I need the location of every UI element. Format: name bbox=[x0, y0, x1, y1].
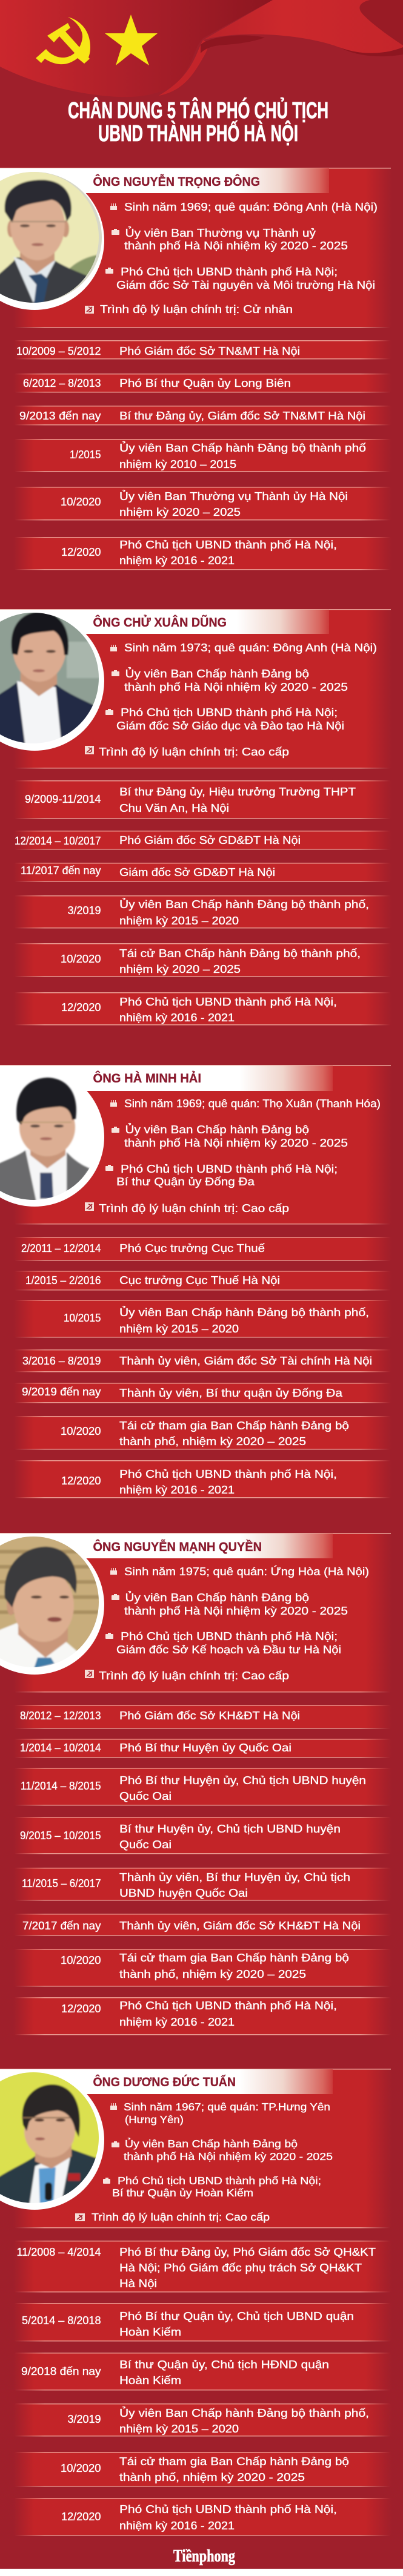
row bbox=[13, 2498, 392, 2535]
row: Phó Chủ tịch UBND thành phố Hà Nội, bbox=[119, 2000, 337, 2012]
row bbox=[13, 1817, 392, 1854]
icon: birth bbox=[110, 1100, 117, 1107]
row: 11/2015 – 6/2017 bbox=[22, 1877, 101, 1889]
row: 3/2019 bbox=[68, 2413, 101, 2425]
biography: Phó Chủ tịch UBND thành phố Hà Nội; bbox=[118, 2175, 321, 2187]
biography: Trình độ lý luận chính trị: Cao cấp bbox=[99, 1202, 289, 1214]
row bbox=[13, 780, 392, 819]
row: 9/2019 đến nay bbox=[22, 1386, 101, 1398]
row: Thành ủy viên, Bí thư Huyện ủy, Chủ tịch bbox=[119, 1871, 350, 1883]
row: Cục trưởng Cục Thuế Hà Nội bbox=[119, 1274, 280, 1286]
biography: Phó Chủ tịch UBND thành phố Hà Nội; bbox=[121, 265, 338, 278]
biography: (Hưng Yên) bbox=[125, 2113, 184, 2126]
portrait bbox=[0, 2067, 104, 2210]
row: UBND huyện Quốc Oai bbox=[119, 1887, 248, 1899]
row: nhiệm kỳ 2016 - 2021 bbox=[119, 2016, 235, 2028]
biography: Trình độ lý luận chính trị: Cao cấp bbox=[99, 1669, 289, 1682]
row: 10/2015 bbox=[64, 1312, 101, 1324]
name heading: ÔNG DƯƠNG ĐỨC TUẤN bbox=[93, 2075, 236, 2089]
row: Quốc Oai bbox=[119, 1839, 172, 1851]
row: nhiệm kỳ 2015 – 2020 bbox=[119, 1323, 239, 1335]
row bbox=[13, 992, 392, 1026]
biography: Ủy viên Ban Chấp hành Đảng bộ bbox=[125, 1591, 309, 1604]
row: Hà Nội; Phó Giám đốc phụ trách Sở QH&KT bbox=[119, 2262, 362, 2274]
icon: birth bbox=[110, 1568, 117, 1575]
name heading: ÔNG NGUYỄN MẠNH QUYỀN bbox=[93, 1540, 262, 1554]
icon: briefcase bbox=[112, 1127, 119, 1133]
row: 1/2014 – 10/2014 bbox=[20, 1742, 101, 1754]
biography: Ủy viên Ban Chấp hành Đảng bộ bbox=[125, 667, 309, 680]
icon: party bbox=[85, 1202, 94, 1211]
row bbox=[13, 2452, 392, 2487]
row: nhiệm kỳ 2016 - 2021 bbox=[119, 2520, 235, 2532]
timeline: Hà Minh Hải bbox=[13, 1237, 392, 1498]
row: Tái cử tham gia Ban Chấp hành Đảng bộ bbox=[119, 1952, 349, 1964]
biography: Giám đốc Sở Giáo dục và Đào tạo Hà Nội bbox=[116, 719, 344, 732]
row: 3/2019 bbox=[68, 904, 101, 917]
row: 1/2015 – 2/2016 bbox=[25, 1274, 101, 1286]
row bbox=[13, 406, 392, 425]
row: thành phố, nhiệm kỳ 2020 – 2025 bbox=[119, 1435, 306, 1448]
row bbox=[13, 1914, 392, 1936]
row: 9/2015 – 10/2015 bbox=[20, 1830, 101, 1842]
icon: briefcase bbox=[105, 268, 113, 274]
row bbox=[13, 374, 392, 392]
biography: Phó Chủ tịch UBND thành phố Hà Nội; bbox=[121, 1630, 338, 1642]
panel: Nguyễn Mạnh Quyền bbox=[0, 1532, 392, 1693]
row: 9/2018 đến nay bbox=[21, 2365, 101, 2377]
title bbox=[68, 97, 328, 147]
row: Tái cử Ban Chấp hành Đảng bộ thành phố, bbox=[119, 947, 361, 960]
biography: thành phố Hà Nội nhiệm kỳ 2020 - 2025 bbox=[124, 680, 348, 693]
row: 9/2009-11/2014 bbox=[25, 793, 101, 805]
icon: birth bbox=[110, 203, 117, 210]
row: Giám đốc Sở GD&ĐT Hà Nội bbox=[119, 866, 275, 878]
row bbox=[13, 1768, 392, 1805]
row: 11/2008 – 4/2014 bbox=[17, 2246, 101, 2258]
row: nhiệm kỳ 2015 – 2020 bbox=[119, 915, 239, 927]
row: 10/2020 bbox=[61, 1425, 101, 1437]
row: Phó Giám đốc Sở GD&ĐT Hà Nội bbox=[119, 834, 301, 846]
row: Thành ủy viên, Giám đốc Sở Tài chính Hà Nội bbox=[119, 1355, 372, 1367]
row: Phó Chủ tịch UBND thành phố Hà Nội, bbox=[119, 1468, 337, 1480]
row: Hà Nội bbox=[119, 2278, 157, 2290]
logo: Tiền Phong: Tiềnphong bbox=[173, 2546, 235, 2566]
row: 10/2020 bbox=[61, 2462, 101, 2474]
biography: Giám đốc Sở Kế hoạch và Đầu tư Hà Nội bbox=[116, 1643, 341, 1656]
row: nhiệm kỳ 2020 – 2025 bbox=[119, 963, 241, 975]
biography: Phó Chủ tịch UBND thành phố Hà Nội; bbox=[121, 706, 338, 719]
row bbox=[13, 2403, 392, 2436]
row: 7/2017 đến nay bbox=[22, 1920, 101, 1932]
biography: Phó Chủ tịch UBND thành phố Hà Nội; bbox=[121, 1162, 338, 1175]
biography bbox=[85, 200, 378, 315]
portrait bbox=[0, 170, 104, 310]
row: nhiệm kỳ 2015 – 2020 bbox=[119, 2423, 239, 2435]
biography: thành phố Hà Nội nhiệm kỳ 2020 - 2025 bbox=[124, 1136, 348, 1149]
row: nhiệm kỳ 2016 - 2021 bbox=[119, 1484, 235, 1496]
row bbox=[13, 1868, 392, 1901]
row bbox=[13, 863, 392, 881]
icon: briefcase bbox=[112, 1594, 119, 1600]
row: Ủy viên Ban Thường vụ Thành ủy Hà Nội bbox=[119, 490, 348, 502]
name heading: ÔNG HÀ MINH HẢI bbox=[93, 1071, 201, 1085]
icon: party bbox=[75, 2213, 85, 2221]
row: 10/2009 – 5/2012 bbox=[16, 345, 101, 357]
row: 3/2016 – 8/2019 bbox=[22, 1355, 101, 1367]
row bbox=[13, 831, 392, 850]
row bbox=[13, 1300, 392, 1338]
row: 12/2020 bbox=[61, 1475, 101, 1487]
icon: party bbox=[85, 306, 94, 314]
row: Phó Bí thư Huyện ủy, Chủ tịch UBND huyện bbox=[119, 1774, 366, 1787]
row: Chu Văn An, Hà Nội bbox=[119, 802, 229, 814]
portrait bbox=[0, 608, 104, 751]
icon: briefcase bbox=[105, 709, 113, 715]
portrait bbox=[0, 1532, 104, 1675]
row: 10/2020 bbox=[61, 496, 101, 508]
row bbox=[13, 1460, 392, 1498]
row: 11/2017 đến nay bbox=[21, 865, 101, 877]
timeline: Dương Đức Tuấn bbox=[13, 2241, 392, 2535]
row: Phó Bí thư Quận ủy, Chủ tịch UBND quận bbox=[119, 2310, 354, 2322]
icon: hammer and sickle bbox=[36, 17, 90, 64]
icon: birth bbox=[110, 2103, 117, 2110]
biography: Sinh năm 1975; quê quán: Ứng Hòa (Hà Nội) bbox=[124, 1565, 369, 1578]
icon: briefcase bbox=[103, 2178, 110, 2184]
row: 12/2020 bbox=[61, 2511, 101, 2523]
row bbox=[13, 1997, 392, 2035]
row: Ủy viên Ban Chấp hành Đảng bộ thành phố, bbox=[119, 1306, 369, 1319]
row: Quốc Oai bbox=[119, 1790, 172, 1802]
row bbox=[13, 1416, 392, 1449]
icon: star bbox=[105, 15, 158, 65]
row: Thành ủy viên, Bí thư quận ủy Đống Đa bbox=[119, 1387, 343, 1399]
portrait bbox=[0, 1067, 104, 1207]
icon: briefcase bbox=[105, 1165, 113, 1171]
row: Phó Bí thư Huyện ủy Quốc Oai bbox=[119, 1742, 291, 1754]
row: 9/2013 đến nay bbox=[19, 410, 101, 422]
row bbox=[13, 2353, 392, 2390]
biography: Sinh năm 1973; quê quán: Đông Anh (Hà Nội) bbox=[124, 641, 377, 654]
row: nhiệm kỳ 2016 - 2021 bbox=[119, 555, 235, 567]
row: Ủy viên Ban Chấp hành Đảng bộ thành phố, bbox=[119, 898, 369, 911]
row: 12/2020 bbox=[61, 1001, 101, 1013]
row: thành phố, nhiệm kỳ 2020 - 2025 bbox=[119, 2471, 305, 2483]
row bbox=[13, 2241, 392, 2292]
row: nhiệm kỳ 2016 - 2021 bbox=[119, 1012, 235, 1024]
row: nhiệm kỳ 2010 – 2015 bbox=[119, 458, 236, 470]
panel: Hà Minh Hải bbox=[0, 1065, 392, 1224]
biography: Ủy viên Ban Chấp hành Đảng bộ bbox=[125, 2137, 298, 2150]
row: Bí thư Huyện ủy, Chủ tịch UBND huyện bbox=[119, 1823, 341, 1835]
panel: Dương Đức Tuấn bbox=[0, 2067, 392, 2228]
row: Phó Giám đốc Sở KH&ĐT Hà Nội bbox=[119, 1710, 300, 1722]
biography: Giám đốc Sở Tài nguyên và Môi trường Hà Nội bbox=[116, 278, 375, 291]
biography: thành phố Hà Nội nhiệm kỳ 2020 - 2025 bbox=[124, 239, 348, 252]
row bbox=[13, 1271, 392, 1291]
row: Phó Cục trưởng Cục Thuế bbox=[119, 1242, 265, 1254]
row: Phó Bí thư Đảng ủy, Phó Giám đốc Sở QH&KT bbox=[119, 2246, 376, 2258]
biography bbox=[85, 1565, 369, 1682]
row: Phó Chủ tịch UBND thành phố Hà Nội, bbox=[119, 539, 337, 551]
row: Hoàn Kiếm bbox=[119, 2374, 181, 2387]
biography: Trình độ lý luận chính trị: Cao cấp bbox=[92, 2211, 270, 2223]
icon: birth bbox=[110, 645, 117, 651]
row: 11/2014 – 8/2015 bbox=[21, 1780, 101, 1792]
biography: Bí thư Quận ủy Đống Đa bbox=[116, 1175, 255, 1188]
timeline: Nguyễn Mạnh Quyền bbox=[13, 1705, 392, 2035]
biography: Trình độ lý luận chính trị: Cử nhân bbox=[100, 303, 293, 315]
biography: Ủy viên Ban Thường vụ Thành uỷ bbox=[125, 226, 316, 239]
biography: Trình độ lý luận chính trị: Cao cấp bbox=[99, 745, 289, 758]
biography: Ủy viên Ban Chấp hành Đảng bộ bbox=[125, 1123, 309, 1136]
row bbox=[13, 2303, 392, 2342]
icon: briefcase bbox=[112, 229, 119, 235]
biography: thành phố Hà Nội nhiệm kỳ 2020 - 2025 bbox=[124, 2150, 333, 2163]
row: nhiệm kỳ 2020 – 2025 bbox=[119, 506, 241, 518]
row bbox=[13, 1739, 392, 1758]
row bbox=[13, 1705, 392, 1729]
panel: Nguyễn Trọng Đông bbox=[0, 168, 392, 328]
icon: party bbox=[85, 1670, 94, 1678]
row: 8/2012 – 12/2013 bbox=[20, 1710, 101, 1722]
row bbox=[13, 1383, 392, 1403]
biography bbox=[85, 641, 377, 758]
row: Ủy viên Ban Chấp hành Đảng bộ thành phố bbox=[119, 441, 366, 454]
row bbox=[13, 1349, 392, 1372]
panel: Chử Xuân Dũng bbox=[0, 608, 392, 769]
row: Tái cử tham gia Ban Chấp hành Đảng bộ bbox=[119, 1420, 349, 1432]
row bbox=[13, 943, 392, 977]
name heading: ÔNG NGUYỄN TRỌNG ĐÔNG bbox=[93, 174, 260, 189]
icon: briefcase bbox=[105, 1633, 113, 1639]
row: 1/2015 bbox=[70, 449, 101, 461]
row: Thành ủy viên, Giám đốc Sở KH&ĐT Hà Nội bbox=[119, 1920, 361, 1932]
row: 5/2014 – 8/2018 bbox=[22, 2314, 101, 2327]
biography bbox=[75, 2101, 333, 2223]
biography bbox=[85, 1097, 381, 1214]
row: Hoàn Kiếm bbox=[119, 2326, 181, 2338]
row: Bí thư Đảng ủy, Hiệu trưởng Trường THPT bbox=[119, 786, 356, 798]
title: UBND THÀNH PHỐ HÀ NỘI bbox=[98, 119, 298, 147]
biography: thành phố Hà Nội nhiệm kỳ 2020 - 2025 bbox=[124, 1604, 348, 1617]
icon: briefcase bbox=[112, 670, 119, 676]
row: Phó Bí thư Quận ủy Long Biên bbox=[119, 377, 291, 389]
row bbox=[13, 1237, 392, 1260]
flag header bbox=[0, 0, 403, 97]
biography: Bí thư Quận ủy Hoàn Kiếm bbox=[112, 2187, 253, 2199]
row: 2/2011 – 12/2014 bbox=[21, 1242, 101, 1254]
row: 12/2014 – 10/2017 bbox=[15, 835, 101, 847]
row bbox=[13, 1949, 392, 1987]
row bbox=[13, 537, 392, 570]
row: 10/2020 bbox=[61, 953, 101, 965]
biography: Sinh năm 1967; quê quán: TP.Hưng Yên bbox=[124, 2101, 330, 2113]
row: 12/2020 bbox=[61, 2003, 101, 2015]
row: Phó Giám đốc Sở TN&MT Hà Nội bbox=[119, 345, 300, 357]
row: 10/2020 bbox=[61, 1954, 101, 1966]
biography: Sinh năm 1969; quê quán: Đông Anh (Hà Nội) bbox=[124, 200, 378, 213]
name heading: ÔNG CHỬ XUÂN DŨNG bbox=[93, 615, 227, 630]
timeline: Chử Xuân Dũng bbox=[13, 780, 392, 1026]
row: Tái cử tham gia Ban Chấp hành Đảng bộ bbox=[119, 2456, 349, 2468]
timeline: Nguyễn Trọng Đông bbox=[13, 340, 392, 570]
row bbox=[13, 439, 392, 472]
row: Bí thư Quận ủy, Chủ tịch HĐND quận bbox=[119, 2359, 329, 2371]
row: Phó Chủ tịch UBND thành phố Hà Nội, bbox=[119, 2503, 337, 2515]
row: Bí thư Đảng ủy, Giám đốc Sở TN&MT Hà Nội bbox=[119, 410, 365, 422]
row: Phó Chủ tịch UBND thành phố Hà Nội, bbox=[119, 996, 337, 1008]
icon: briefcase bbox=[112, 2141, 119, 2147]
icon: party bbox=[85, 746, 94, 754]
row bbox=[13, 895, 392, 929]
row: Ủy viên Ban Chấp hành Đảng bộ thành phố, bbox=[119, 2406, 369, 2419]
row: thành phố, nhiệm kỳ 2020 – 2025 bbox=[119, 1968, 306, 1980]
row: 6/2012 – 8/2013 bbox=[23, 377, 101, 389]
biography: Sinh năm 1969; quê quán: Thọ Xuân (Thanh Hóa) bbox=[124, 1097, 381, 1110]
row bbox=[13, 487, 392, 521]
row: 12/2020 bbox=[61, 546, 101, 558]
row bbox=[13, 340, 392, 360]
